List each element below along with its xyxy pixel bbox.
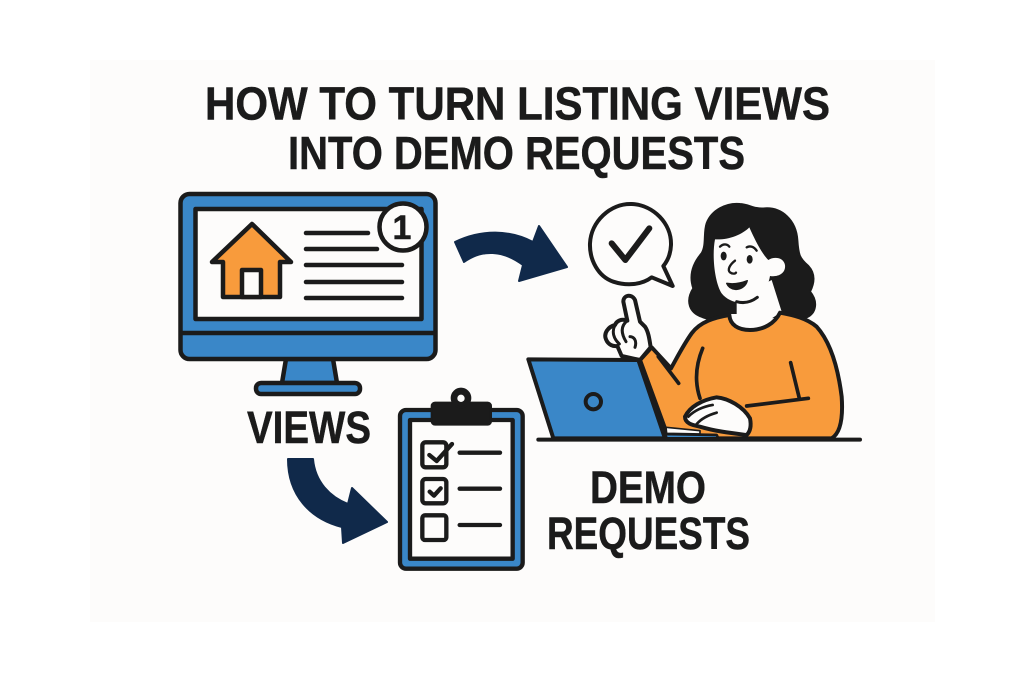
clipboard paper [410, 420, 513, 559]
laptop logo [586, 394, 601, 409]
icon: clipboard checklist [400, 389, 523, 569]
torso and arm [640, 313, 842, 438]
label: demo requests: DEMO [590, 462, 706, 513]
title: INTO DEMO REQUESTS [288, 127, 745, 179]
listing text lines [306, 233, 402, 298]
white cuff [666, 427, 700, 434]
clipboard clip [432, 389, 491, 425]
hair [689, 204, 815, 319]
eyes and brows [721, 252, 753, 264]
laptop screen [528, 359, 665, 438]
monitor body [180, 194, 436, 359]
raised hand [605, 296, 651, 360]
empty row 3 [422, 515, 500, 540]
background panel [90, 60, 935, 622]
lower hand [685, 397, 751, 435]
face [714, 227, 785, 303]
monitor base [256, 383, 360, 394]
arrow: monitor to person [455, 226, 567, 281]
sweater details [658, 348, 808, 406]
title [205, 78, 830, 179]
jaw line [737, 297, 757, 303]
illustration: woman at laptop [528, 204, 860, 440]
nose [729, 261, 736, 274]
badge: number 1 [380, 204, 426, 250]
smile [727, 281, 747, 289]
checked row 1 [422, 442, 500, 467]
icon: speech bubble with check [590, 204, 673, 286]
laptop base [665, 434, 718, 438]
monitor stand [282, 359, 337, 383]
table line [538, 434, 860, 446]
title: HOW TO TURN LISTING VIEWS [205, 78, 830, 130]
badge: number 1: 1 [393, 209, 411, 247]
arrow: views to clipboard [288, 459, 387, 543]
neck [727, 280, 782, 333]
clipboard board [400, 410, 523, 569]
label: views: VIEWS [247, 402, 371, 453]
monitor screen [196, 209, 422, 319]
monitor divider [181, 331, 435, 335]
label: demo requests [547, 462, 750, 559]
icon: house [212, 224, 291, 297]
label: demo requests: REQUESTS [547, 508, 750, 559]
check mark [612, 228, 649, 260]
icon: desktop monitor with listing [180, 194, 436, 394]
checked row 2 [422, 479, 500, 503]
